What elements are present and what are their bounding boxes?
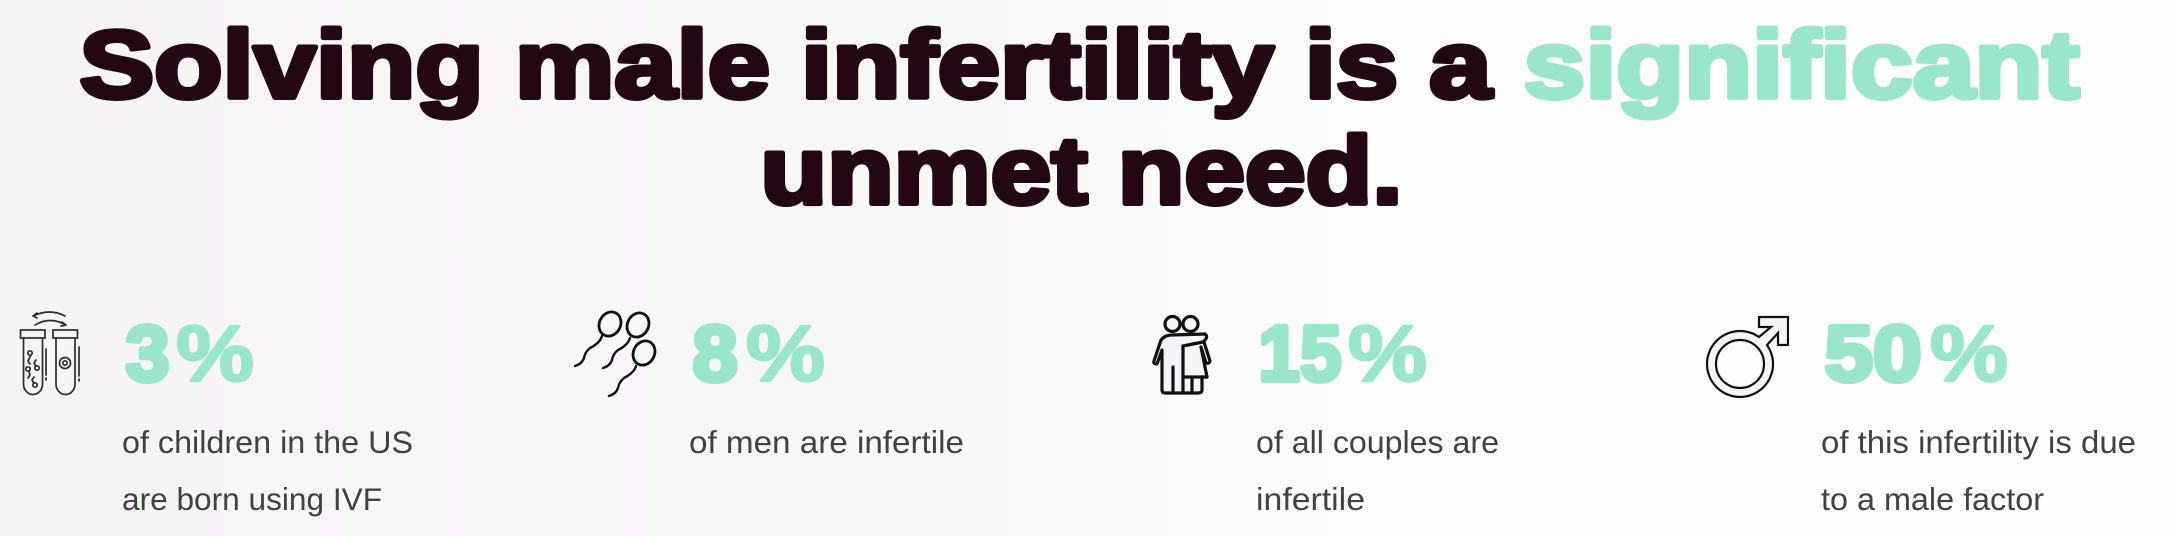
panel: 15% couples [1154, 308, 1499, 517]
text: of all couples are infertile: infertile [1256, 481, 1365, 517]
panel: 50% male factor [1707, 308, 2136, 517]
stat: 8%: % [746, 309, 825, 398]
text: of this infertility is due to a male factor: to a male factor [1821, 481, 2044, 517]
title: significant [1524, 12, 2080, 118]
text: of children in the US are born using IVF: are born using IVF [122, 481, 382, 517]
text: of all couples are infertile: of all couples are [1256, 424, 1499, 460]
stat: 15%: 15 [1258, 308, 1342, 398]
stat: 3%: % [176, 309, 254, 398]
stat: 50% [1824, 308, 2008, 398]
title [80, 12, 2080, 224]
stat: 8%: 8 [692, 308, 738, 398]
text: of this infertility is due to a male factor [1821, 424, 2136, 517]
text: of children in the US are born using IVF [122, 424, 413, 517]
panel: 8% men [575, 308, 964, 460]
stat: 15%: % [1348, 309, 1427, 398]
panel: 3% IVF [20, 308, 413, 517]
icon: male symbol [1707, 317, 1788, 397]
icon: sperm cells [575, 308, 659, 396]
stat: 3% [126, 308, 254, 398]
title: Solving male infertility is a [80, 12, 1492, 118]
stat: 15% [1258, 308, 1427, 398]
stat: 3%: 3 [126, 308, 170, 398]
icon: couple embracing [1154, 316, 1210, 393]
stat: 50%: 50 [1824, 308, 1922, 398]
text: of this infertility is due to a male factor: of this infertility is due [1821, 424, 2136, 460]
stat: 50%: % [1930, 309, 2008, 398]
text: of children in the US are born using IVF: of children in the US [122, 424, 413, 460]
text: of men are infertile: of men are infertile [689, 424, 964, 460]
icon: test tubes [20, 312, 79, 395]
stat: 8% [692, 308, 825, 398]
title: unmet need. [760, 118, 1402, 224]
text: of all couples are infertile [1256, 424, 1499, 517]
